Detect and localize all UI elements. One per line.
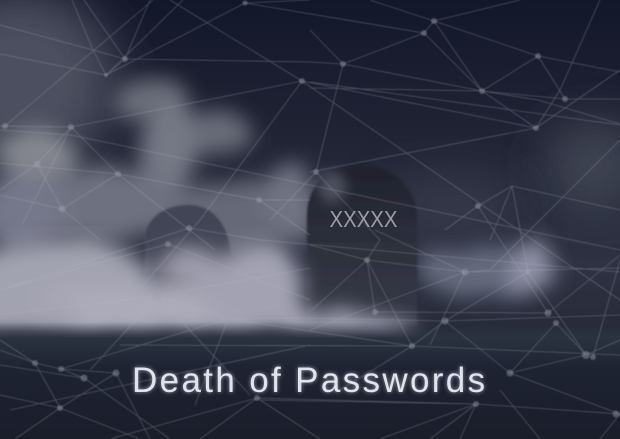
gravestone inscription: XXXXX: [330, 206, 398, 232]
fog behind gravestones: [0, 82, 562, 296]
gravestone: large front: [307, 165, 417, 325]
gravestone: small rear: [145, 205, 232, 272]
title: Death of Passwords: [132, 361, 488, 400]
title: Death of Passwords: [132, 361, 488, 400]
gravestone highlight: [318, 171, 346, 203]
dark ground: [0, 322, 620, 439]
foreground fog bank: [0, 237, 415, 345]
